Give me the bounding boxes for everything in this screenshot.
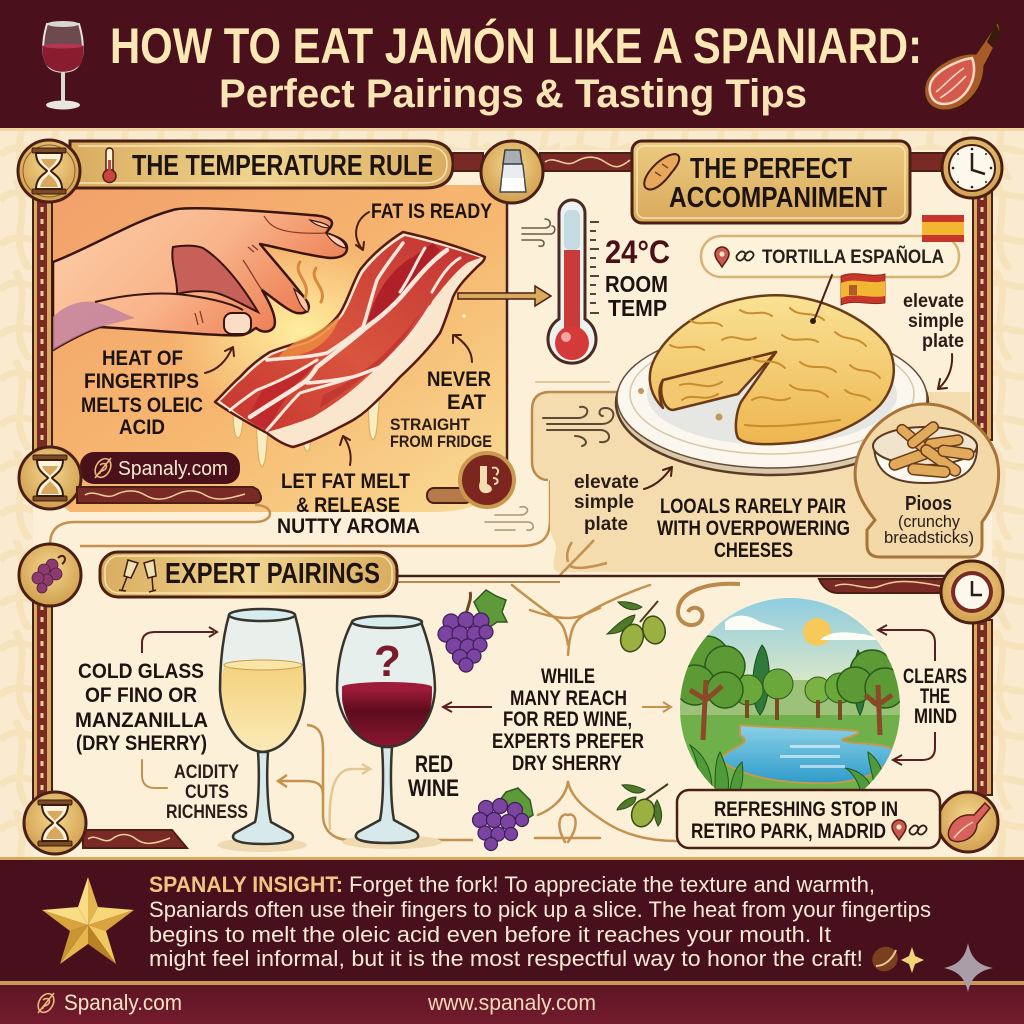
spanish flag rectangle [922,215,964,242]
label: locals rarely pair: WITH OVERPOWERING [657,517,850,540]
icon: clinking glasses [119,560,156,592]
wind swirl lower [485,507,533,530]
insight text [149,872,931,971]
temperature reading: 24°C [605,234,670,270]
icon: olives upper [607,601,668,655]
insight band [0,857,1024,1024]
label: cold glass of fino [75,627,217,755]
icon: small thermometer [103,148,116,182]
insight text: might feel informal, but it is the most respectful way to honor the craft! [149,946,863,971]
picos caption [884,493,974,547]
icon: red wine glass [42,21,84,110]
floral ornament top center [512,585,650,655]
label: while many reach for red wine: FOR RED WINE, [503,708,632,731]
label: clears the mind: MIND [914,705,957,728]
tan curl [678,584,740,625]
label: elevate simple plate lower: plate [584,514,628,535]
label: never eat straight from fridge [390,335,492,451]
temperature reading [605,234,670,321]
label: while many reach for red wine: DRY SHERRY [512,752,622,775]
label: refreshing stop in retiro park: REFRESHING STOP IN [714,798,898,821]
question mark: ? [374,637,401,686]
arrow: to park [642,702,671,712]
heading: expert pairings [100,552,397,597]
footer url: www.spanaly.com [427,990,596,1015]
label: elevate simple plate lower: elevate [574,472,639,493]
label: let fat melt: NUTTY AROMA [277,515,420,538]
icon: jamón medallion [938,792,998,852]
arrow: ham to thermometer [458,286,551,306]
header band [0,0,1024,131]
label: never eat straight from fridge: STRAIGHT [390,415,471,434]
label: fat is ready: FAT IS READY [371,200,492,223]
icon: hourglass medallion top [18,140,80,202]
label: never eat straight from fridge: FROM FRIDGE [390,432,492,451]
label: while many reach for red wine: EXPERTS PREFER [492,730,644,753]
label: locals rarely pair [657,495,850,562]
icon: jamón and sparkles [868,942,924,976]
spanish flag waving [841,274,885,305]
label: heat of fingertips: FINGERTIPS [84,370,199,393]
label: let fat melt [277,436,420,538]
hand reaching for the ham [53,208,347,350]
tortilla label pill: TORTILLA ESPAÑOLA [762,246,944,268]
label: elevate simple plate right: plate [922,331,964,352]
arrow: to red wine [443,702,492,712]
heading: the temperature rule [70,141,453,188]
arrow: label to tortilla [810,275,832,324]
icon: clock medallion lower [941,561,1003,623]
label: cold glass of fino: MANZANILLA [75,709,208,732]
lower tan backdrop [532,392,970,572]
panel: the perfect accompaniment [485,190,999,575]
icon: gold star [42,877,134,964]
frame strip left lower [33,600,52,800]
tortilla española [650,295,894,444]
label: clears the mind: THE [920,685,950,708]
frame strip right lower [973,620,992,795]
frame right strip [973,190,992,440]
heading: the perfect accompaniment: THE PERFECT [690,153,852,185]
icon: baguette [644,154,679,189]
heading: the perfect accompaniment [632,141,910,223]
heading: the perfect accompaniment: ACCOMPANIMENT [669,182,887,214]
fat marbling veins [230,243,460,430]
heading: the temperature rule: THE TEMPERATURE RULE [132,150,433,182]
label: never eat straight from fridge: EAT [447,391,486,414]
icon: grape medallion [19,544,81,606]
label: acidity cuts richness: CUTS [185,782,229,803]
picos caption: breadsticks) [884,528,974,547]
label: while many reach for red wine: MANY REACH [510,687,627,710]
label: refreshing stop in retiro park: RETIRO PARK, MADRID [691,820,886,843]
slice of jamón [215,232,485,467]
insight text: SPANALY INSIGHT: [149,872,343,897]
heading: expert pairings: EXPERT PAIRINGS [165,558,380,590]
label: red wine: WINE [408,775,459,802]
icon: hourglass medallion lower [19,447,81,509]
Spanaly logo pill: Spanaly.com [118,458,228,480]
label: acidity cuts richness: RICHNESS [166,802,248,823]
picos caption: (crunchy [898,512,960,531]
melting fat drips [233,395,380,467]
insight text: Spaniards often use their fingers to pick up a slice. The heat from your fingertips [149,897,931,922]
frame strip left [33,190,52,455]
red wine glass [337,616,442,849]
insight text: begins to melt the oleic acid even before it reaches your mouth. It [149,922,831,947]
panel: the temperature rule [33,185,551,538]
icon: grapes upper [438,590,507,672]
frame stub and burner icon [77,453,514,507]
temperature reading: TEMP [608,295,667,321]
frame strip between temperature heading and salt [453,153,948,171]
thermometer 24 degrees [548,200,599,363]
label: elevate simple plate lower: simple [574,492,634,513]
label: locals rarely pair: CHEESES [714,539,793,562]
label: elevate simple plate lower [574,467,672,535]
label: while many reach for red wine: WHILE [541,665,595,688]
picos bubble [855,404,999,557]
label: cold glass of fino: OF FINO OR [85,684,197,707]
tortilla label pill [701,236,959,277]
label: fat is ready [356,200,492,250]
insight text: Forget the fork! To appreciate the texture and warmth, [349,872,875,897]
picos caption: Pioos [905,493,952,515]
wind swirl large [543,407,613,446]
label: red wine: RED [415,751,453,778]
label: cold glass of fino: (DRY SHERRY) [76,732,207,755]
title [110,18,922,116]
lean meat [220,236,481,432]
label: clears the mind [878,625,967,765]
label: locals rarely pair: LOOALS RARELY PAIR [660,495,846,518]
label: acidity cuts richness [142,760,248,823]
label: elevate simple plate right [903,291,964,389]
label: clears the mind: CLEARS [903,665,967,688]
connector lines [50,434,638,546]
label: heat of fingertips: ACID [119,416,165,439]
label: never eat straight from fridge: NEVER [427,368,491,391]
label: heat of fingertips [81,347,234,439]
icon: grey sparkle [944,943,993,992]
label: elevate simple plate right: elevate [903,291,964,312]
tan connectors between glasses [278,725,473,840]
label: acidity cuts richness: ACIDITY [174,762,239,783]
floral ornament bottom center [535,782,677,842]
thermometer ticks [590,222,599,313]
label: heat of fingertips: HEAT OF [102,347,183,370]
label: red wine [408,751,459,802]
trees [675,636,905,740]
temperature reading: ROOM [605,271,668,297]
label: let fat melt: LET FAT MELT [281,470,410,493]
illustration: retiro park [675,598,905,800]
heat waves [298,262,323,302]
panel: expert pairings [33,576,992,858]
plate with tortilla [616,295,928,475]
curled palm shadow [172,246,258,312]
panel background [50,185,507,512]
footer logo: Spanaly.com [64,990,182,1015]
icon: salt shaker medallion [481,141,543,203]
white sherry glass [217,609,307,852]
icon: grapes lower [472,788,533,850]
label: let fat melt: & RELEASE [296,494,400,517]
bowl of picos [873,420,977,483]
reeds [690,745,885,790]
icon: olives lower [617,784,668,830]
label: while many reach for red wine [492,665,644,775]
title: Perfect Pairings & Tasting Tips [219,72,807,116]
label: heat of fingertips: MELTS OLEIC [81,394,203,417]
label: cold glass of fino: COLD GLASS [78,660,204,683]
icon: hourglass medallion bottom [24,792,86,854]
label: refreshing stop in retiro park [677,790,940,848]
label: elevate simple plate right: simple [908,311,964,332]
wind swirl small [522,219,555,246]
Spanaly logo pill [80,452,240,484]
vine sprig [560,540,607,575]
icon: jamón leg [925,22,1001,110]
frame stubs [83,579,945,848]
icon: clock medallion top [942,138,1002,198]
onion texture [670,308,880,426]
